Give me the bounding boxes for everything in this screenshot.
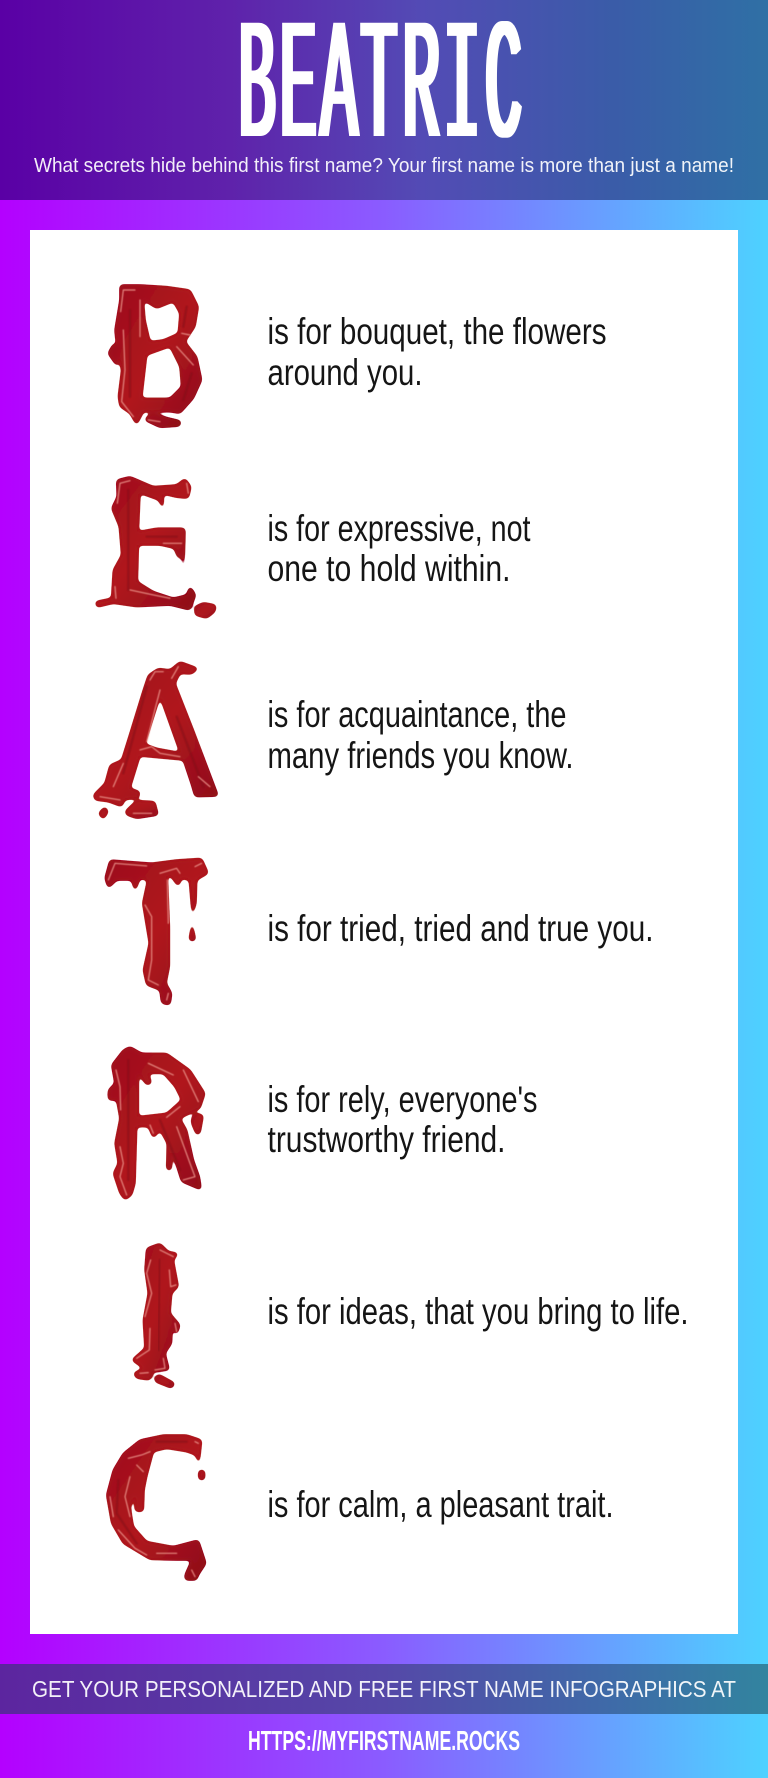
subtitle: What secrets hide behind this first name? Your first name is more than just a name! bbox=[34, 154, 734, 177]
icon: blood letter R bbox=[108, 1047, 205, 1200]
title bbox=[239, 0, 522, 188]
icon: blood letter I bbox=[132, 1243, 180, 1388]
icon: blood letter B bbox=[108, 285, 202, 427]
icon: blood letter C bbox=[107, 1435, 206, 1580]
text: A line: is for acquaintance, the bbox=[268, 694, 566, 735]
text: R line bbox=[268, 1079, 538, 1160]
white content panel bbox=[30, 230, 738, 1634]
text: A line: many friends you know. bbox=[268, 735, 574, 776]
icon: blood letter E bbox=[95, 477, 216, 618]
footer url: HTTPS://MYFIRSTNAME.ROCKS bbox=[248, 1725, 520, 1756]
text: B line: is for bouquet, the flowers bbox=[268, 311, 606, 352]
text: A line bbox=[268, 694, 574, 776]
text: C line: is for calm, a pleasant trait. bbox=[268, 1484, 614, 1525]
text: T line: is for tried, tried and true you. bbox=[268, 908, 654, 949]
icon: blood letter T bbox=[105, 858, 208, 1005]
text: E line bbox=[268, 508, 531, 589]
text: B line bbox=[268, 311, 606, 393]
text: R line: trustworthy friend. bbox=[268, 1119, 506, 1160]
text: B line: around you. bbox=[268, 352, 422, 393]
text: E line: is for expressive, not bbox=[268, 508, 531, 549]
footer call to action band bbox=[0, 1664, 768, 1714]
text: E line: one to hold within. bbox=[268, 548, 510, 589]
icon: blood letter A bbox=[93, 662, 218, 819]
text: R line: is for rely, everyone's bbox=[268, 1079, 538, 1120]
header band bbox=[0, 0, 768, 200]
